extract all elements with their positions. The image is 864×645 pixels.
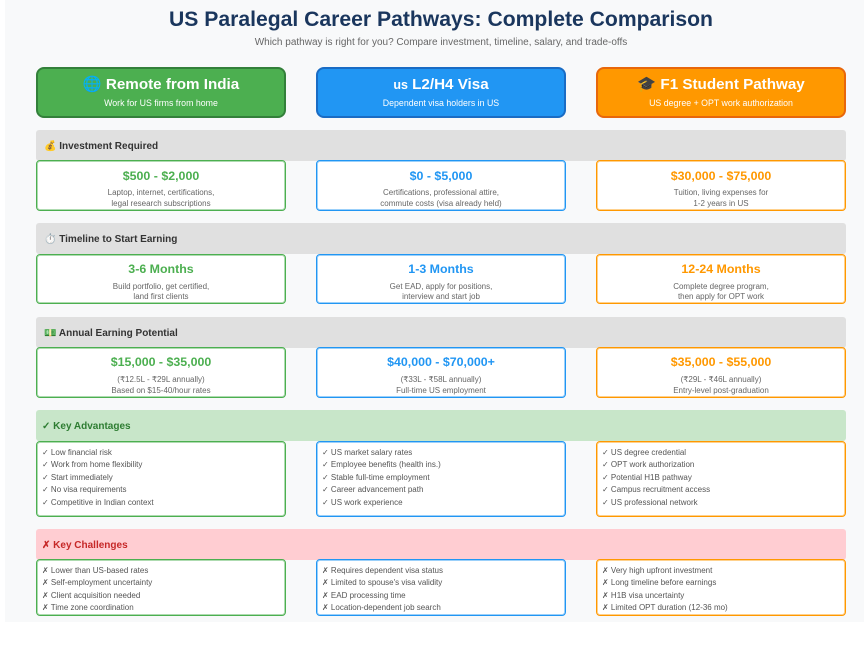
card: student challenges: ✗ Long timeline before earnings	[602, 578, 716, 587]
header: L2/H4 Visa	[316, 67, 566, 118]
card: remote earnings: $15,000 - $35,000	[111, 355, 211, 369]
header: F1 Student Pathway: US degree + OPT work authorization	[649, 98, 793, 108]
card: remote investment: $500 - $2,000	[123, 169, 199, 183]
card: remote advantages	[36, 441, 286, 517]
header: Remote from India	[36, 67, 286, 118]
header: F1 Student Pathway: 🎓 F1 Student Pathway	[637, 76, 805, 93]
card: student investment: $30,000 - $75,000	[671, 169, 771, 183]
card: visa challenges: ✗ Location-dependent job search	[322, 603, 441, 612]
card: visa timeline	[316, 254, 566, 304]
card: visa challenges: ✗ Limited to spouse's visa validity	[322, 578, 442, 587]
card: remote challenges: ✗ Lower than US-based rates	[42, 566, 148, 575]
card: student investment: 1-2 years in US	[693, 199, 749, 208]
card: visa investment: Certifications, professional attire,	[383, 188, 499, 197]
card: student timeline: then apply for OPT work	[678, 292, 764, 301]
card: visa timeline: 1-3 Months	[408, 262, 474, 276]
card: remote advantages: ✓ Start immediately	[42, 473, 113, 482]
section bar: Timeline to Start Earning: ⏱️ Timeline to Start Earning	[44, 234, 177, 245]
card: remote advantages: ✓ Low financial risk	[42, 448, 112, 456]
card: remote earnings: (₹12.5L - ₹29L annually)	[117, 375, 205, 384]
card: visa timeline: Get EAD, apply for positions,	[390, 282, 492, 290]
card: remote challenges: ✗ Time zone coordination	[42, 603, 134, 612]
section bar: Key Advantages: ✓ Key Advantages	[42, 421, 131, 432]
card: remote challenges: ✗ Client acquisition needed	[42, 591, 140, 600]
card: student earnings: (₹29L - ₹46L annually)	[681, 375, 761, 384]
card: remote timeline: land first clients	[133, 292, 189, 301]
card: visa earnings	[316, 347, 566, 398]
card: visa challenges: ✗ Requires dependent visa status	[322, 566, 443, 575]
title: US Paralegal Career Pathways: Complete Comparison	[169, 8, 713, 31]
card: remote timeline: 3-6 Months	[128, 262, 194, 276]
card: student challenges: ✗ H1B visa uncertainty	[602, 591, 684, 600]
card: student challenges	[596, 559, 846, 616]
section bar: Timeline to Start Earning	[36, 223, 846, 254]
card: visa investment: $0 - $5,000	[410, 169, 472, 183]
card: student timeline: Complete degree program,	[673, 282, 769, 290]
header: F1 Student Pathway	[596, 67, 846, 118]
card: student timeline	[596, 254, 846, 304]
section bar: Investment Required	[36, 130, 846, 161]
card: remote challenges: ✗ Self-employment uncertainty	[42, 578, 152, 587]
section bar: Key Challenges: ✗ Key Challenges	[42, 540, 128, 551]
card: visa investment: commute costs (visa already held)	[380, 199, 502, 208]
card: remote advantages: ✓ Work from home flexibility	[42, 460, 142, 469]
card: remote challenges	[36, 559, 286, 616]
card: remote advantages: ✓ No visa requirements	[42, 485, 127, 494]
section bar: Investment Required: 💰 Investment Required	[44, 141, 158, 152]
card: visa challenges: ✗ EAD processing time	[322, 591, 406, 600]
card: visa advantages: ✓ Employee benefits (health ins.)	[322, 460, 441, 469]
card: student challenges: ✗ Limited OPT duration (12-36 mo)	[602, 603, 728, 612]
card: remote investment: legal research subscriptions	[111, 199, 211, 208]
card: student advantages: ✓ US degree credential	[602, 448, 686, 456]
card: student investment	[596, 160, 846, 211]
card: remote earnings: Based on $15-40/hour rates	[111, 386, 211, 395]
header: L2/H4 Visa: us L2/H4 Visa	[393, 76, 489, 93]
header: Remote from India: 🌐 Remote from India	[83, 76, 239, 93]
card: visa advantages: ✓ Career advancement path	[322, 485, 423, 494]
section bar: Annual Earning Potential: 💵 Annual Earning Potential	[44, 328, 178, 339]
card: remote timeline	[36, 254, 286, 304]
card: remote advantages: ✓ Competitive in Indian context	[42, 498, 154, 507]
card: remote earnings	[36, 347, 286, 398]
card: visa advantages: ✓ US work experience	[322, 498, 403, 507]
card: visa timeline: interview and start job	[402, 292, 480, 301]
card: student advantages: ✓ Potential H1B pathway	[602, 473, 692, 482]
header: L2/H4 Visa: Dependent visa holders in US	[383, 98, 499, 108]
card: student earnings: $35,000 - $55,000	[671, 355, 771, 369]
card: visa investment	[316, 160, 566, 211]
card: visa earnings: (₹33L - ₹58L annually)	[401, 375, 481, 384]
card: remote investment	[36, 160, 286, 211]
section bar: Key Challenges	[36, 529, 846, 560]
card: student challenges: ✗ Very high upfront investment	[602, 566, 712, 575]
card: remote investment: Laptop, internet, certifications,	[108, 188, 214, 197]
card: student earnings: Entry-level post-graduation	[673, 386, 769, 395]
card: student investment: Tuition, living expenses for	[674, 188, 768, 197]
section bar: Annual Earning Potential	[36, 317, 846, 348]
section bar: Key Advantages	[36, 410, 846, 441]
card: visa earnings: Full-time US employment	[396, 386, 486, 395]
card: student advantages: ✓ OPT work authorization	[602, 460, 694, 469]
card: visa advantages	[316, 441, 566, 517]
card: student advantages: ✓ US professional network	[602, 498, 698, 507]
card: student advantages: ✓ Campus recruitment access	[602, 485, 710, 494]
card: student timeline: 12-24 Months	[681, 262, 761, 276]
card: visa challenges	[316, 559, 566, 616]
subtitle: Which pathway is right for you? Compare investment, timeline, salary, and trade-offs	[255, 37, 627, 48]
card: remote timeline: Build portfolio, get certified,	[113, 282, 209, 290]
card: visa advantages: ✓ Stable full-time employment	[322, 473, 430, 482]
card: student earnings	[596, 347, 846, 398]
card: visa earnings: $40,000 - $70,000+	[387, 355, 495, 369]
header: Remote from India: Work for US firms from home	[104, 98, 218, 108]
card: student advantages	[596, 441, 846, 517]
card: visa advantages: ✓ US market salary rates	[322, 448, 412, 456]
